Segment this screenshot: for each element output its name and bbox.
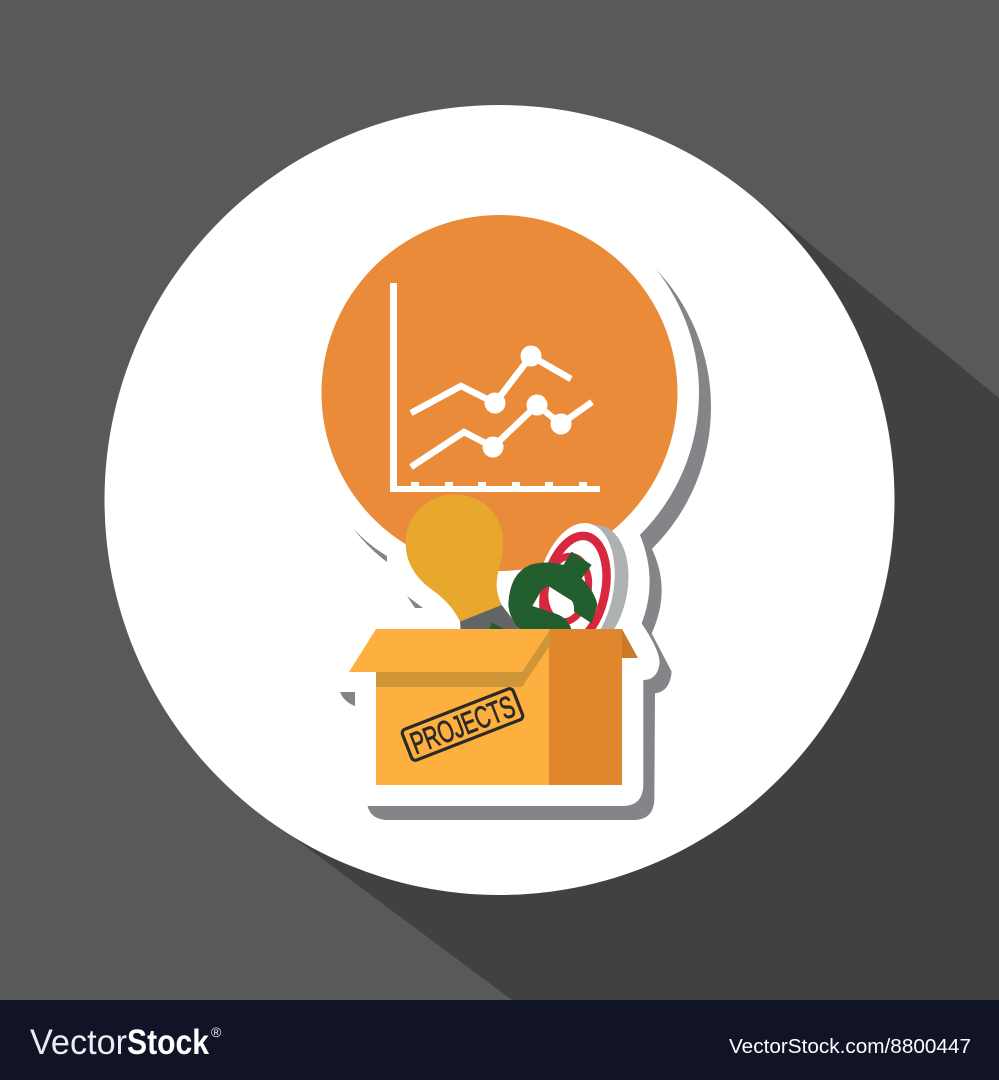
target red outer ring bbox=[534, 530, 616, 650]
gray sliver accents bbox=[340, 528, 423, 706]
target side bbox=[534, 517, 640, 663]
sticker white outline bbox=[299, 193, 699, 806]
orange circle bbox=[322, 215, 678, 571]
footer bar bbox=[0, 1000, 999, 1080]
white circle panel bbox=[104, 105, 894, 895]
axis ticks bbox=[411, 482, 587, 487]
sticker gray shadow bbox=[311, 207, 711, 820]
green fragment on base bbox=[489, 623, 505, 631]
long shadow of circle bbox=[285, 211, 999, 1000]
right flap bbox=[622, 629, 638, 658]
target red inner ring bbox=[540, 553, 594, 625]
icon: dollar sign bbox=[508, 552, 597, 630]
footer logo bbox=[30, 1023, 222, 1062]
icon: target bbox=[524, 516, 640, 664]
bulb base bbox=[460, 605, 518, 631]
line chart bbox=[390, 283, 600, 492]
footer logo: Stock bbox=[127, 1023, 209, 1062]
stamp: projects: PROJECTS bbox=[406, 689, 520, 761]
box front bbox=[376, 629, 550, 785]
box side bbox=[549, 629, 622, 785]
footer logo: ® bbox=[211, 1024, 222, 1040]
footer logo: Vector bbox=[30, 1023, 127, 1062]
stamp: projects bbox=[401, 687, 524, 763]
left flap bbox=[349, 629, 550, 672]
icon: light bulb bbox=[406, 494, 518, 631]
box bbox=[349, 629, 638, 785]
chart axes bbox=[390, 283, 600, 492]
bulb glass bbox=[406, 494, 503, 622]
footer image id: VectorStock.com/8800447 bbox=[729, 1036, 971, 1058]
flap shadow bbox=[376, 630, 550, 687]
lower data line bbox=[411, 394, 592, 467]
upper data line bbox=[411, 346, 571, 414]
target face bbox=[524, 516, 626, 664]
